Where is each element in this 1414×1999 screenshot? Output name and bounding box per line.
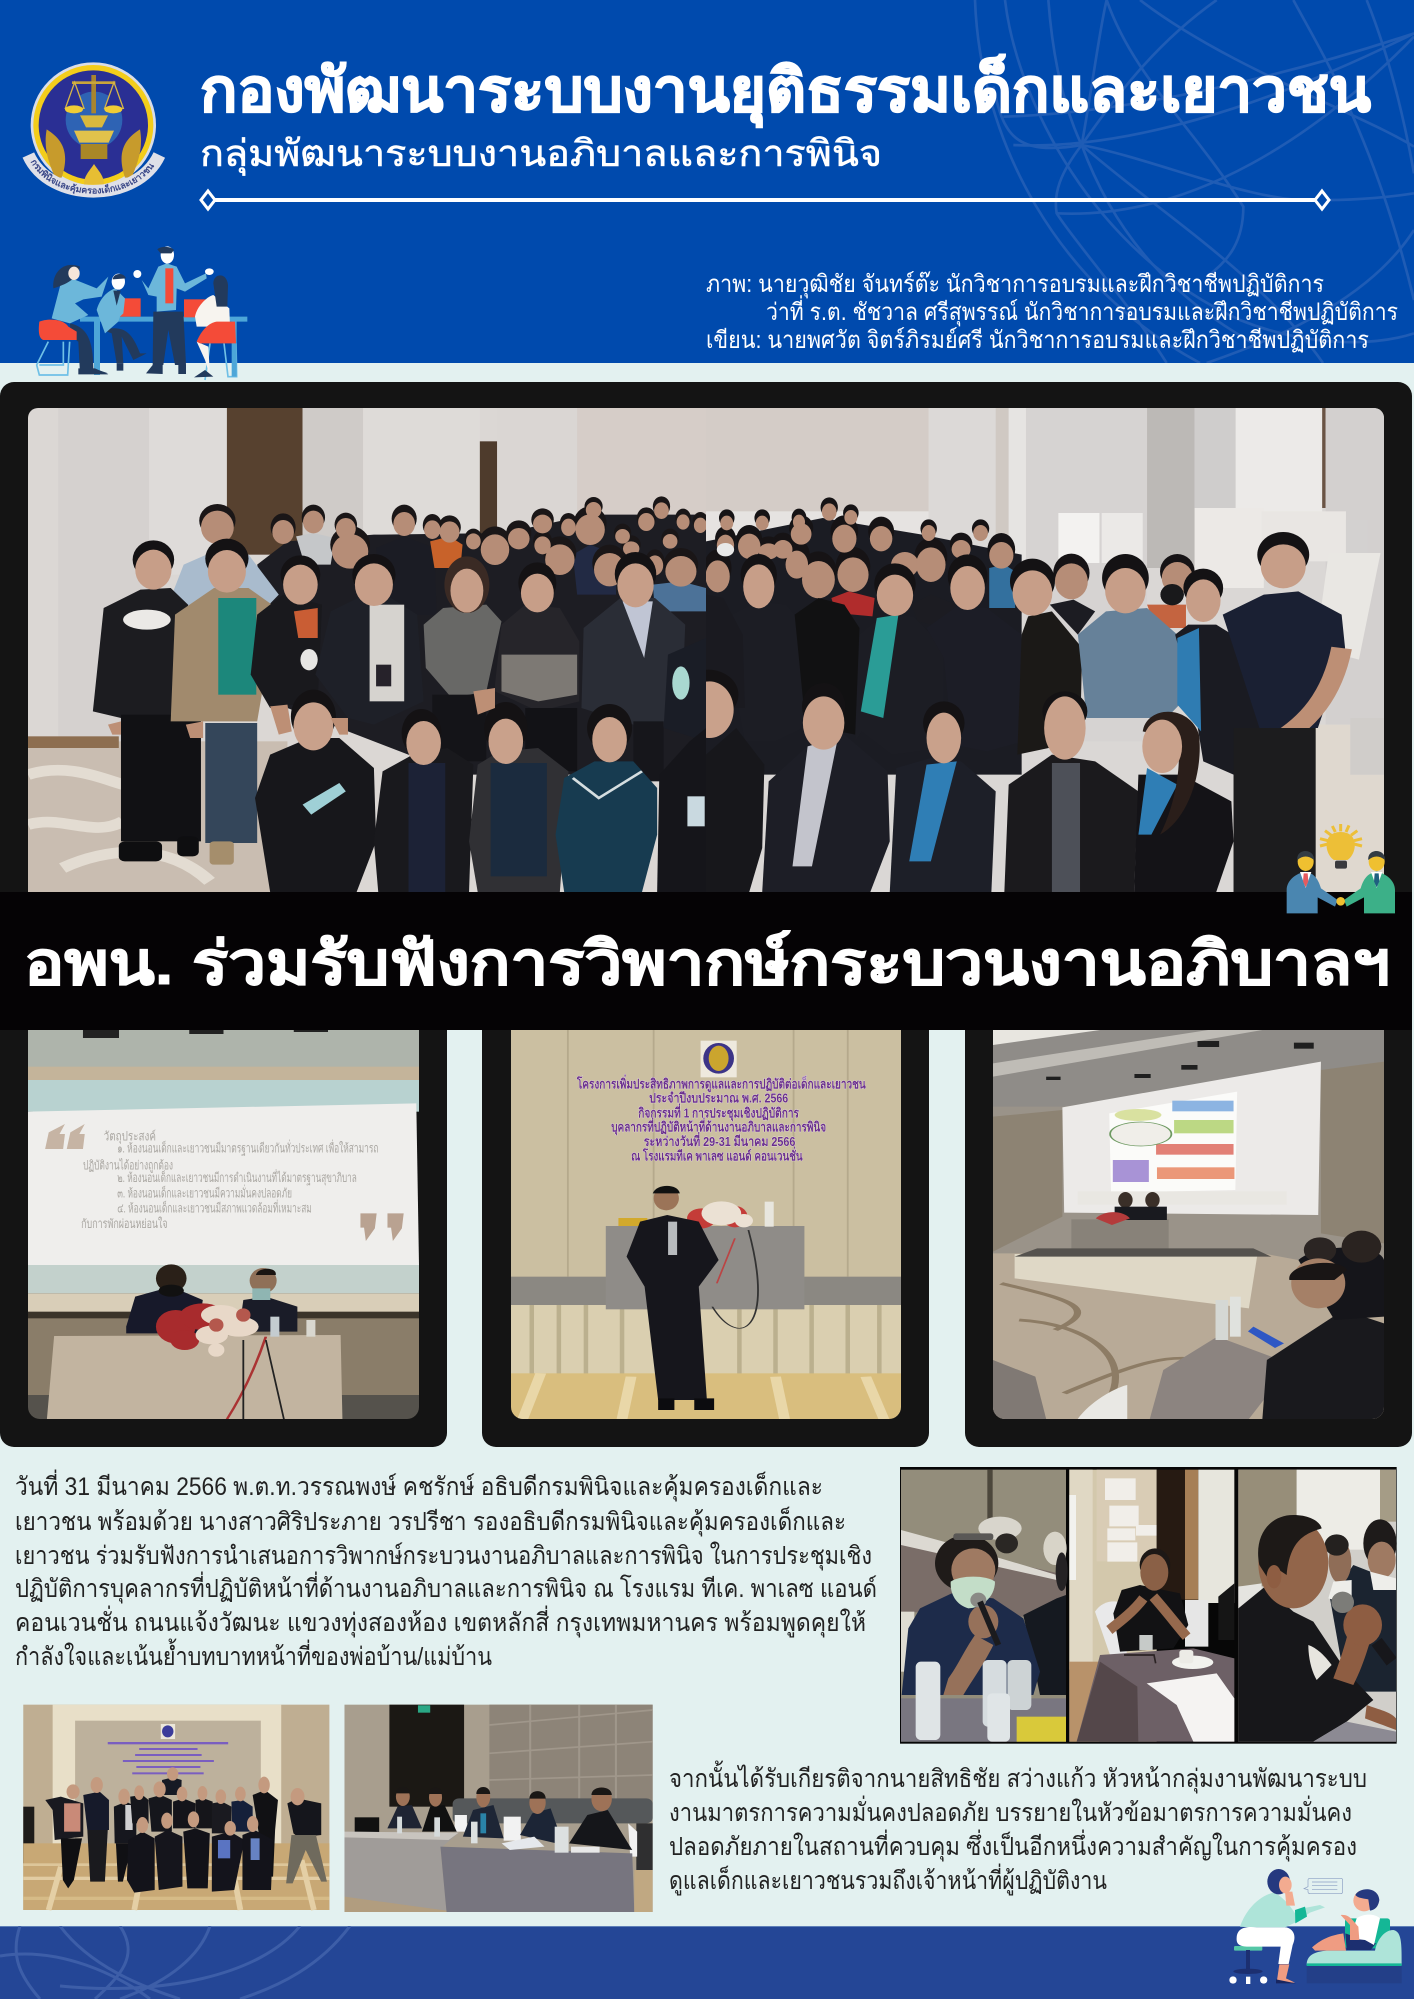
photo: objectives slide and panel speakers: วัตถุประสงค์ xyxy=(104,1129,156,1144)
group pose xyxy=(23,1705,329,1910)
photo: presentation screen in conference room xyxy=(993,1030,1384,1419)
right speaker xyxy=(1238,1470,1397,1742)
footer band xyxy=(0,1926,1414,1999)
credits text: ภาพ: นายวุฒิชัย จันทร์ต๊ะ นักวิชาการอบรมและฝึกวิชาชีพปฏิบัติการ xyxy=(706,270,1324,299)
paragraph one: วันที่ 31 มีนาคม 2566 พ.ต.ท.วรรณพงษ์ คชรักษ์ อธิบดีกรมพินิจและคุ้มครองเด็กและ xyxy=(15,1469,823,1502)
illustration: counselling conversation xyxy=(1229,1869,1402,1984)
panel: photo frame left xyxy=(0,1030,447,1447)
photo: keynote speaker on stage xyxy=(511,1030,901,1419)
panel: photo frame right xyxy=(965,1030,1412,1447)
photo: objectives slide and panel speakers xyxy=(28,1030,419,1419)
band title: อพน. ร่วมรับฟังการวิพากษ์กระบวนงานอภิบาลฯ xyxy=(24,930,1390,997)
centre speaker xyxy=(1069,1470,1234,1742)
title band xyxy=(0,892,1412,1030)
credits text xyxy=(706,270,1398,354)
logo: juvenile observation department seal: กรมพินิจและคุ้มครองเด็กและเยาวชน xyxy=(30,160,154,194)
logo: juvenile observation department seal xyxy=(22,62,165,198)
handshake and light bulb icon xyxy=(1286,824,1395,914)
paragraph two: ดูแลเด็กและเยาวชนรวมถึงเจ้าหน้าที่ผู้ปฏิบัติงาน xyxy=(669,1863,1107,1896)
panel: photo frame centre xyxy=(482,1030,929,1447)
main group photo xyxy=(28,408,1384,892)
paragraph one: กำลังใจและเน้นย้ำบทบาทหน้าที่ของพ่อบ้าน/แม่บ้าน xyxy=(15,1638,492,1671)
title divider with diamonds xyxy=(199,188,1331,212)
title: กองพัฒนาระบบงานยุติธรรมเด็กและเยาวชน xyxy=(200,54,1371,128)
panel: main photo frame xyxy=(0,382,1412,902)
panel table xyxy=(344,1705,653,1912)
paragraph one xyxy=(15,1469,877,1671)
photo strip: three speakers xyxy=(900,1467,1397,1744)
header globe pattern xyxy=(974,0,1414,363)
paragraph two xyxy=(669,1760,1367,1896)
left speaker xyxy=(901,1470,1068,1742)
footer globe pattern xyxy=(0,1926,351,1999)
header band xyxy=(0,0,1414,363)
illustration: meeting at table xyxy=(36,246,248,380)
photo: objectives slide and panel speakers: กับการพักผ่อนหย่อนใจ xyxy=(81,1217,168,1231)
photos: group pose and panel table xyxy=(23,1704,653,1912)
subtitle: กลุ่มพัฒนาระบบงานอภิบาลและการพินิจ xyxy=(200,133,882,176)
